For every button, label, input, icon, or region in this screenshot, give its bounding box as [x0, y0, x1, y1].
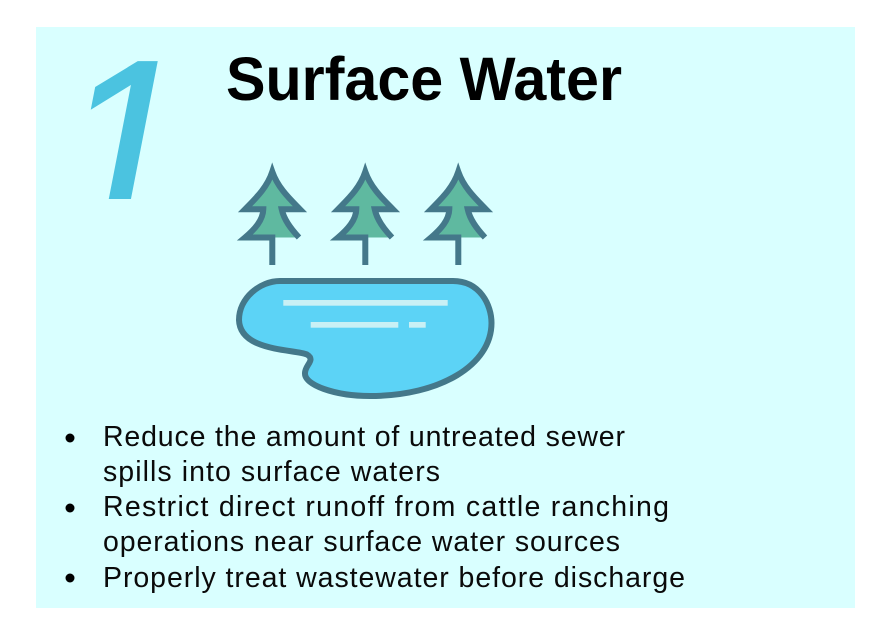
number 1: 1 — [60, 14, 187, 268]
icon: lake — [239, 281, 492, 396]
bullet 2: operations near surface water sources — [103, 526, 620, 558]
icon: tree middle — [338, 172, 393, 265]
bullet 1: Reduce the amount of untreated sewer — [103, 421, 626, 453]
bullet 3: Properly treat wastewater before discharge — [103, 562, 685, 594]
bullet 1: spills into surface waters — [103, 456, 440, 488]
bullet list — [66, 421, 685, 594]
icon: tree right — [431, 172, 486, 265]
bullet 2 — [66, 491, 669, 558]
bullet 2: Restrict direct runoff from cattle ranching — [103, 491, 669, 523]
icon: tree left — [245, 172, 300, 265]
bullet 1 — [66, 421, 626, 488]
title: Surface Water — [226, 45, 622, 113]
icon: three trees — [245, 172, 486, 265]
